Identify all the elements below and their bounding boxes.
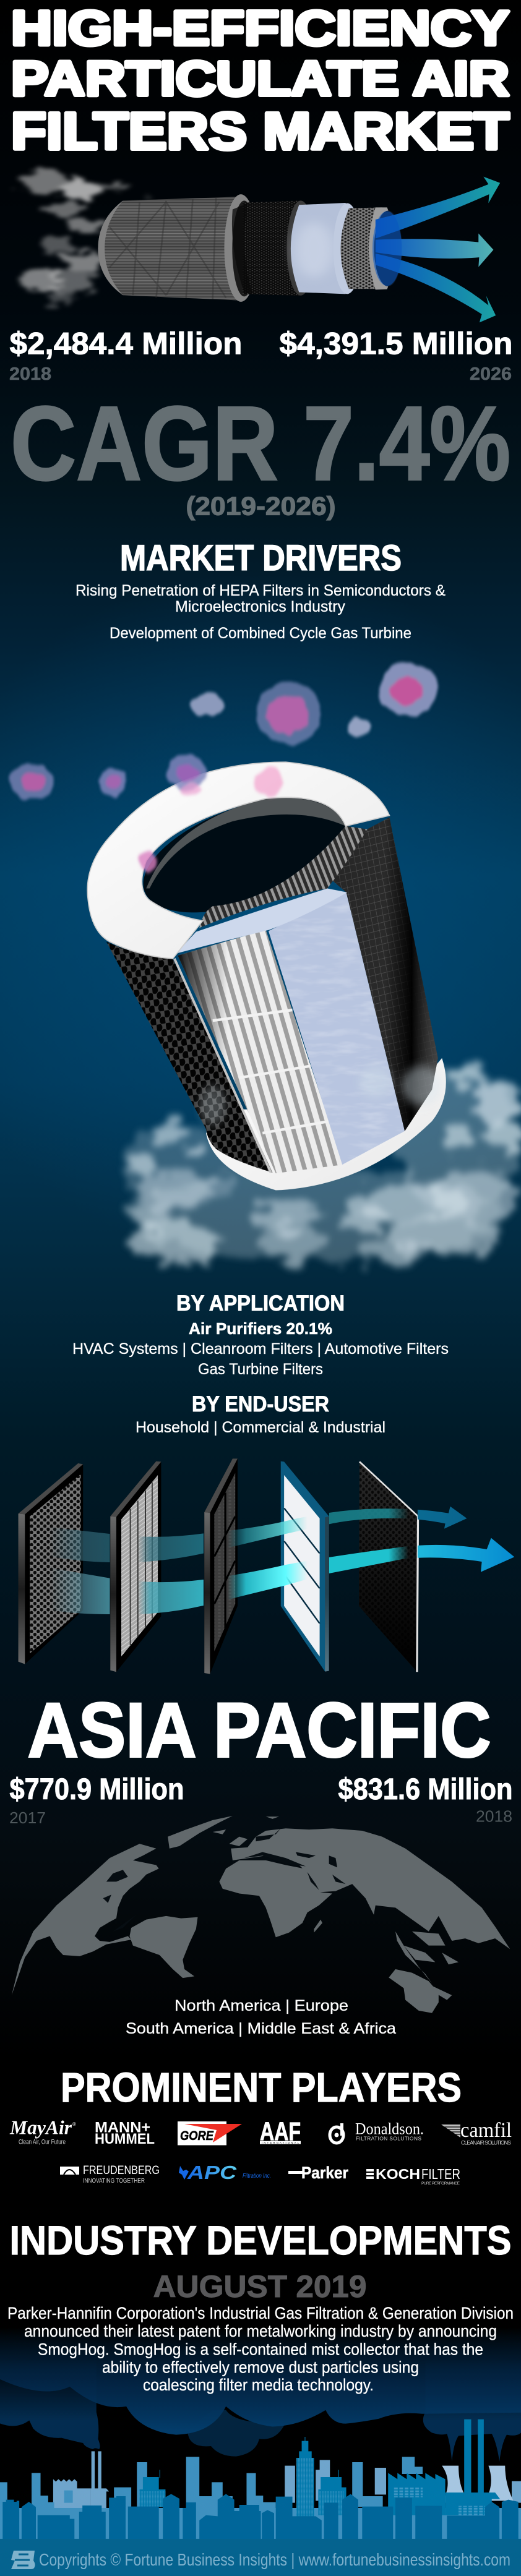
logo: Donaldson	[330, 2120, 424, 2143]
title: FILTERS MARKET	[11, 102, 509, 160]
regions list	[126, 1997, 396, 2037]
airflow band lower with arrow	[50, 1538, 514, 1615]
metal edge	[174, 959, 271, 1173]
illustration: filter layers with airflow	[19, 1458, 514, 1674]
bottom white rim	[206, 1058, 446, 1190]
inner wall	[146, 798, 345, 888]
panel 4 white media	[281, 1461, 329, 1672]
market size 2026: 2026	[470, 364, 512, 384]
logo: Camfil: camfil	[460, 2119, 512, 2142]
regions list: North America | Europe	[174, 1997, 348, 2014]
market size 2018: $2,484.4 Million	[10, 327, 243, 361]
pleated top ring	[199, 826, 367, 928]
application list	[72, 1340, 449, 1378]
panel 1 perforated	[19, 1463, 83, 1664]
logo: APC: Filtration Inc.	[243, 2173, 271, 2180]
by end-user heading: BY END-USER	[192, 1392, 329, 1416]
regional value 2017: 2017	[9, 1808, 46, 1827]
illustration: large air purifier filter with flowers and dust	[10, 662, 521, 1265]
market drivers list: Development of Combined Cycle Gas Turbine	[110, 625, 411, 642]
logo: Mann+Hummel: HUMMEL	[95, 2131, 155, 2147]
smoke entering filter	[20, 169, 150, 304]
Africa	[219, 1860, 332, 1937]
logo: Camfil: CLEAN AIR SOLUTIONS	[461, 2139, 511, 2146]
market drivers list	[75, 582, 446, 642]
dust clouds	[123, 1063, 521, 1265]
logo: AAF: INTERNATIONAL	[262, 2141, 299, 2144]
black carbon section	[232, 200, 315, 296]
development paragraph	[7, 2304, 514, 2394]
arrow: up	[376, 177, 500, 239]
pale media layer	[269, 892, 405, 1165]
main smog cloud	[0, 2308, 521, 2435]
logo: Fortune Business Insights	[11, 2551, 35, 2569]
arrow: down	[376, 254, 496, 322]
regional value 2017: $770.9 Million	[10, 1773, 184, 1806]
perforated outer wall	[106, 942, 272, 1173]
pale band on top	[176, 888, 347, 954]
logo: AAF: AAF	[260, 2117, 301, 2146]
airflow band upper with arrow	[50, 1507, 467, 1562]
logo: APC: APC	[187, 2162, 237, 2183]
middle blue buildings	[0, 2457, 521, 2539]
market size 2018: 2018	[9, 364, 51, 384]
inner hole	[133, 774, 356, 935]
residual dust on filter	[199, 1066, 442, 1125]
regional heading: ASIA PACIFIC	[27, 1687, 491, 1774]
logo: Freudenberg	[60, 2164, 160, 2184]
logo: Donaldson: FILTRATION SOLUTIONS	[356, 2136, 421, 2142]
application list: HVAC Systems | Cleanroom Filters | Automotive Filters	[72, 1340, 449, 1358]
seas and lakes	[103, 1828, 345, 1932]
perforated inner section	[340, 207, 402, 289]
logo: Parker: Parker	[301, 2163, 348, 2182]
prominent players heading: PROMINENT PLAYERS	[61, 2065, 462, 2111]
smog clouds plumes	[0, 2358, 521, 2462]
title: HIGH-EFFICIENCY	[11, 0, 509, 56]
logo: Koch Filter: FILTER	[421, 2166, 460, 2182]
logo: Mann+Hummel	[95, 2119, 155, 2147]
market drivers heading: MARKET DRIVERS	[120, 538, 402, 578]
illustration: world map globe	[12, 1816, 510, 2013]
regions list: South America | Middle East & Africa	[126, 2020, 396, 2037]
title	[11, 0, 509, 160]
regional value 2017	[9, 1773, 184, 1827]
logo: Gore: GORE	[180, 2129, 214, 2143]
front dark buildings	[2, 2494, 519, 2539]
panel 5 dark perforated	[359, 1461, 418, 1672]
blue towers and factories	[140, 2420, 500, 2516]
logo: MayAir: ®	[72, 2121, 76, 2127]
market size 2026	[280, 327, 512, 384]
development paragraph: SmogHog. SmogHog is a self-contained mist collector that has the	[38, 2340, 483, 2359]
South America	[129, 1916, 198, 1978]
Greenland	[168, 1816, 233, 1849]
white top cap	[87, 762, 389, 959]
pleated layer	[178, 930, 343, 1173]
pale HEPA section	[291, 203, 361, 294]
development paragraph: ability to effectively remove dust particles using	[102, 2358, 419, 2376]
logo: Koch Filter: KOCH	[376, 2166, 420, 2182]
logo: Mann+Hummel: MANN+	[95, 2119, 150, 2136]
title: PARTICULATE AIR	[11, 51, 509, 106]
North America	[12, 1844, 159, 1995]
factory	[388, 2473, 446, 2515]
market size 2018	[9, 327, 243, 384]
end-user list: Household | Commercial & Industrial	[136, 1419, 385, 1436]
application list: Gas Turbine Filters	[198, 1361, 323, 1378]
development paragraph: coalescing filter media technology.	[143, 2376, 374, 2394]
flowers	[10, 662, 438, 874]
regional value 2018	[338, 1773, 512, 1826]
Australia	[389, 1969, 439, 2013]
dark mesh layer	[332, 818, 438, 1131]
market drivers list: Microelectronics Industry	[175, 598, 345, 615]
office right	[318, 2470, 347, 2515]
footer band	[0, 2539, 521, 2576]
power plant	[446, 2420, 500, 2515]
panel 2 pleated	[110, 1461, 161, 1672]
logo: Koch Filter	[366, 2166, 460, 2186]
back light buildings and cooling towers	[53, 2451, 521, 2513]
CAGR period: (2019-2026)	[186, 491, 335, 521]
city skyline	[0, 2420, 521, 2576]
logo: Koch Filter: PURE PERFORMANCE	[421, 2181, 460, 2186]
date: AUGUST 2019	[153, 2269, 366, 2304]
logo: APC	[179, 2162, 271, 2183]
market drivers list: Rising Penetration of HEPA Filters in Semiconductors &	[75, 582, 446, 599]
arrow: straight	[376, 233, 493, 267]
illustration: cylindrical filter with smoke and arrows	[20, 169, 500, 322]
air purifiers share: Air Purifiers 20.1%	[189, 1319, 332, 1338]
logo: Gore	[178, 2121, 242, 2145]
logo: MayAir: Clean Air, Our Future	[19, 2139, 66, 2146]
by application heading: BY APPLICATION	[176, 1291, 345, 1316]
logo: Donaldson: Donaldson.	[355, 2120, 424, 2138]
office left	[140, 2470, 165, 2507]
logo: Freudenberg: FREUDENBERG	[83, 2164, 160, 2177]
regional value 2018: 2018	[476, 1807, 512, 1826]
logo: Camfil	[441, 2119, 512, 2146]
market size 2026: $4,391.5 Million	[280, 327, 512, 361]
skyscraper	[296, 2437, 314, 2516]
Eurasia	[213, 1816, 510, 1949]
blue glow at filter outlet	[372, 211, 402, 286]
panel 3 carbon	[204, 1458, 238, 1674]
outer gray mesh section	[98, 194, 257, 302]
Southeast Asia islands	[395, 1932, 459, 2000]
logos	[9, 2116, 512, 2186]
logo: Freudenberg: INNOVATING TOGETHER	[83, 2177, 145, 2184]
logo: MayAir: MayAir	[9, 2116, 72, 2139]
